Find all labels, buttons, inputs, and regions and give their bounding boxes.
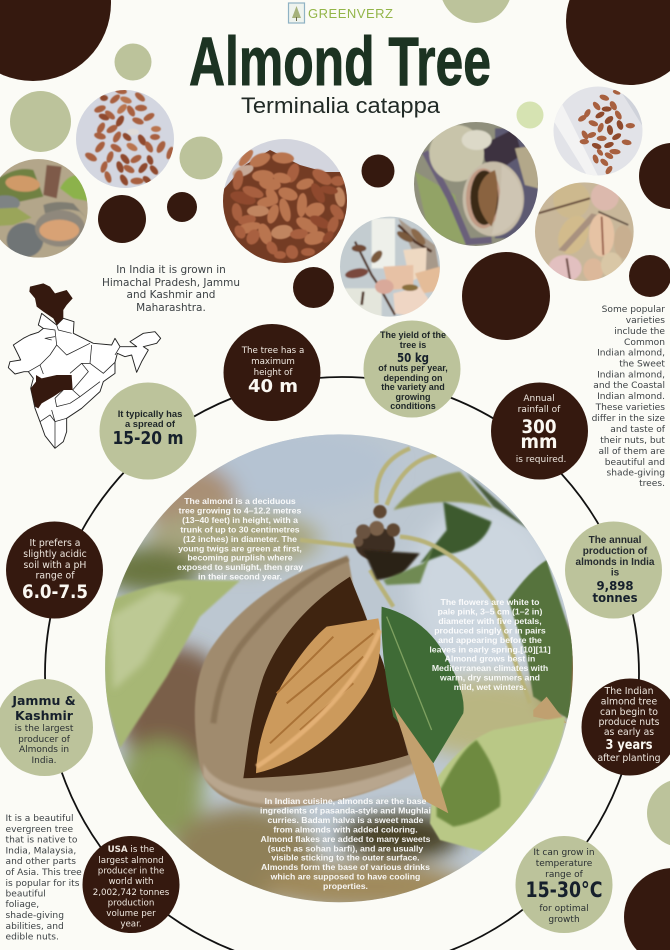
text: popular varieties: differ in the size — [592, 414, 665, 424]
central photo caption: flowers: Mediterranean climates with — [432, 663, 548, 673]
node: largest producer: Jammu & — [11, 693, 76, 708]
state: Maharashtra — [31, 375, 73, 408]
central photo caption: cuisine: visible sticking to the outer surface. — [271, 853, 420, 863]
central photo caption: flowers: pale pink, 3–5 cm (1–2 in) — [438, 606, 542, 616]
node: maximum height — [224, 324, 320, 421]
text: popular varieties: all of them are — [598, 447, 665, 457]
node: years to produce: after planting — [597, 753, 661, 764]
node: rainfall: is required. — [516, 455, 566, 465]
text: popular varieties: Some popular — [602, 305, 665, 315]
node: soil pH: 6.0-7.5 — [22, 582, 88, 603]
node: soil pH: soil with a pH — [24, 560, 86, 571]
photo: almond pod — [412, 120, 542, 248]
node: temperature — [516, 836, 612, 933]
node: annual production: is — [611, 568, 620, 578]
central photo caption: about the tree: (13–40 feet) in height, with a — [182, 515, 298, 525]
node: temperature: 15-30°C — [526, 878, 602, 902]
subtitle: Terminalia catappa — [241, 93, 441, 118]
node: spread: a spread of — [125, 418, 176, 429]
central almond photo — [100, 427, 587, 910]
node: annual production: tonnes — [592, 590, 638, 605]
node: yield: 50 kg — [397, 350, 429, 365]
central photo caption: flowers: The flowers are white to — [441, 597, 539, 607]
intro text: where it grows: In India it is grown in — [116, 264, 226, 276]
node: maximum height: height of — [254, 368, 293, 378]
central photo caption: cuisine: which are supposed to have cooling — [270, 872, 420, 882]
intro text: where it grows — [102, 264, 240, 314]
text: evergreen description: and other parts — [6, 857, 76, 867]
text: popular varieties: shade-giving — [607, 468, 665, 478]
node: largest producer — [0, 679, 93, 776]
text: evergreen description: evergreen tree — [6, 825, 74, 835]
text: popular varieties: the Sweet — [619, 360, 665, 370]
node: spread: 15-20 m — [112, 429, 184, 449]
central photo caption: about the tree: tree growing to 4–12.2 metres — [179, 506, 301, 516]
intro text: where it grows: Maharashtra. — [136, 302, 206, 314]
node: soil pH: slightly acidic — [23, 549, 87, 560]
central photo caption: flowers: mild, wet winters. — [454, 682, 526, 692]
photo: almonds on branch — [0, 158, 90, 258]
node: years to produce: almond tree — [601, 696, 658, 708]
text: popular varieties: their nuts, but — [600, 436, 665, 446]
node: USA production: largest almond — [98, 856, 164, 866]
node: yield — [364, 320, 460, 418]
node: annual production — [565, 522, 662, 618]
text: evergreen description: It is a beautiful — [6, 814, 74, 824]
node: temperature: It can grow in — [533, 848, 595, 858]
central photo caption: cuisine: Almond flakes are added to many sweets — [261, 834, 431, 844]
central photo caption: flowers: and appearing before the — [438, 635, 542, 645]
node: largest producer: India. — [32, 756, 56, 766]
text: popular varieties — [592, 305, 666, 489]
node: yield: tree is — [400, 340, 426, 350]
node: USA production: year. — [120, 920, 142, 930]
node: largest producer: Almonds in — [19, 745, 69, 755]
node: yield: The yield of the — [380, 330, 446, 340]
node: rainfall: mm — [520, 431, 558, 453]
text: evergreen description: foliage, — [6, 900, 39, 910]
text: evergreen description: that is native to — [6, 836, 78, 846]
photo: almonds on marble — [553, 86, 645, 180]
text: popular varieties: Indian almond. — [597, 392, 665, 402]
node: years to produce: The Indian — [604, 686, 654, 697]
central photo caption: cuisine: curries. Badam halva is a sweet made — [268, 815, 424, 825]
node: annual production: almonds in India — [576, 557, 655, 568]
central photo caption: flowers: leaves in early spring.[10][11] — [429, 644, 551, 654]
connector ring — [45, 377, 639, 950]
logo: Greenverz — [288, 3, 393, 23]
intro text: where it grows: Himachal Pradesh, Jammu — [102, 277, 240, 289]
central photo caption: cuisine: (such as sohan barfi), and are usually — [268, 843, 423, 853]
central photo caption: flowers: diameter with five petals, — [438, 616, 542, 626]
text: popular varieties: Common — [624, 338, 665, 348]
node: maximum height: maximum — [251, 357, 295, 367]
text: popular varieties: Indian almond, — [597, 370, 665, 380]
central photo caption: about the tree: The almond is a deciduous — [184, 496, 296, 506]
central photo caption: about the tree: trunk of up to 30 centimetres — [180, 524, 300, 534]
node: yield: growing — [396, 392, 430, 402]
node: years to produce: can begin to — [600, 707, 658, 718]
node: spread: It typically has — [118, 408, 182, 419]
bud cluster — [353, 505, 400, 560]
node: USA production: producer in the — [98, 866, 164, 876]
logo: Greenverz: GREENVERZ — [308, 6, 393, 21]
state: Jammu and Kashmir — [29, 283, 73, 325]
text: popular varieties: beautiful and — [605, 458, 665, 468]
central photo caption: about the tree — [177, 496, 303, 582]
node: rainfall — [491, 382, 588, 480]
node: temperature: for optimal — [539, 904, 589, 914]
node: yield: of nuts per year, — [378, 363, 448, 373]
node: USA production: world with — [108, 877, 154, 887]
text: popular varieties: Indian almond, — [597, 348, 665, 358]
text: evergreen description: shade-giving — [6, 911, 64, 921]
node: years to produce — [582, 678, 670, 776]
node: soil pH — [6, 522, 103, 618]
text: popular varieties: and taste of — [610, 425, 666, 435]
leaf: left — [103, 580, 240, 748]
stems — [300, 448, 530, 703]
central photo caption: cuisine: properties. — [323, 881, 368, 891]
node: years to produce: produce nuts — [598, 717, 660, 728]
node: soil pH: range of — [36, 570, 75, 582]
node: temperature: range of — [545, 870, 584, 880]
central photo caption: about the tree: in their second year. — [198, 572, 282, 582]
node: USA production: USA is the — [108, 845, 154, 855]
central photo caption: about the tree: young twigs are green at first, — [178, 543, 302, 553]
text: popular varieties: include the — [614, 327, 665, 337]
node: years to produce: 3 years — [606, 738, 653, 753]
text: evergreen description: India, Malaysia, — [6, 846, 76, 856]
almond kernel — [256, 618, 380, 773]
node: rainfall: rainfall of — [518, 405, 561, 415]
node: temperature: growth — [548, 915, 580, 925]
node: largest producer: Kashmir — [15, 708, 74, 723]
central photo caption: flowers: produced singly or in pairs — [434, 625, 546, 635]
central photo caption: cuisine: In Indian cuisine, almonds are the base — [265, 796, 427, 806]
central photo caption: about the tree: exposed to sunlight, then gray — [177, 562, 303, 572]
almond cavity — [243, 577, 408, 778]
text: evergreen description: beautiful — [6, 890, 46, 900]
almond hull — [195, 558, 415, 808]
node: USA production — [82, 836, 180, 933]
text: popular varieties: and the Coastal — [593, 381, 665, 391]
text: popular varieties: varieties — [626, 316, 665, 326]
central photo caption: cuisine: Almonds form the base of various drinks — [261, 862, 430, 872]
node: yield: depending on — [384, 373, 442, 383]
node: temperature: temperature — [536, 859, 593, 869]
node: maximum height: 40 m — [248, 376, 298, 397]
map of India — [8, 283, 161, 448]
central photo caption: flowers — [429, 597, 551, 692]
text: popular varieties: trees. — [639, 479, 665, 489]
central photo caption: about the tree: becoming purplish where — [187, 553, 293, 563]
node: rainfall: Annual — [523, 394, 555, 404]
leaf: lower right — [430, 717, 565, 852]
central photo caption: about the tree: (12 inches) in diameter. The — [183, 534, 297, 544]
node: rainfall: 300 — [522, 416, 556, 438]
leaf: centre — [381, 607, 464, 763]
node: annual production: production of — [583, 546, 648, 557]
node: maximum height: The tree has a — [241, 346, 304, 356]
leaf: right — [508, 560, 573, 720]
intro text: where it grows: and Kashmir and — [127, 289, 215, 301]
central photo caption: cuisine: ingredients of pasanda-style and Mughlai — [260, 806, 431, 816]
text: evergreen description: is popular for its — [6, 879, 80, 889]
title: Almond Tree — [189, 23, 491, 100]
node: yield: the variety and — [381, 382, 445, 392]
node: yield: conditions — [390, 401, 436, 411]
node: annual production: The annual — [589, 535, 642, 546]
central photo caption: flowers: Almond grows best in — [445, 654, 535, 664]
node: largest producer: producer of — [18, 735, 71, 745]
central photo caption: cuisine — [260, 796, 431, 891]
text: evergreen description: abilities, and — [6, 922, 64, 932]
photo: scattered almonds — [76, 87, 175, 188]
photo: pink almond pods — [533, 182, 637, 282]
node: spread — [100, 382, 196, 480]
text: popular varieties: These varieties — [595, 403, 665, 413]
node: USA production: production — [108, 898, 154, 908]
leaf: upper — [393, 472, 493, 510]
central photo caption: cuisine: from almonds with added coloring. — [273, 824, 418, 834]
node: USA production: 2,002,742 tonnes — [93, 888, 170, 898]
text: evergreen description — [6, 814, 82, 942]
central photo caption: flowers: warm, dry summers and — [439, 673, 540, 683]
photo: almond blossom — [338, 215, 442, 318]
text: evergreen description: edible nuts. — [6, 932, 59, 942]
photo: almond pile — [223, 139, 350, 263]
node: annual production: 9,898 — [596, 578, 634, 593]
node: soil pH: It prefers a — [30, 538, 80, 549]
node: years to produce: as early as — [604, 727, 654, 738]
node: largest producer: is the largest — [15, 724, 74, 734]
node: USA production: volume per — [106, 909, 156, 919]
text: evergreen description: of Asia. This tree — [6, 868, 82, 878]
